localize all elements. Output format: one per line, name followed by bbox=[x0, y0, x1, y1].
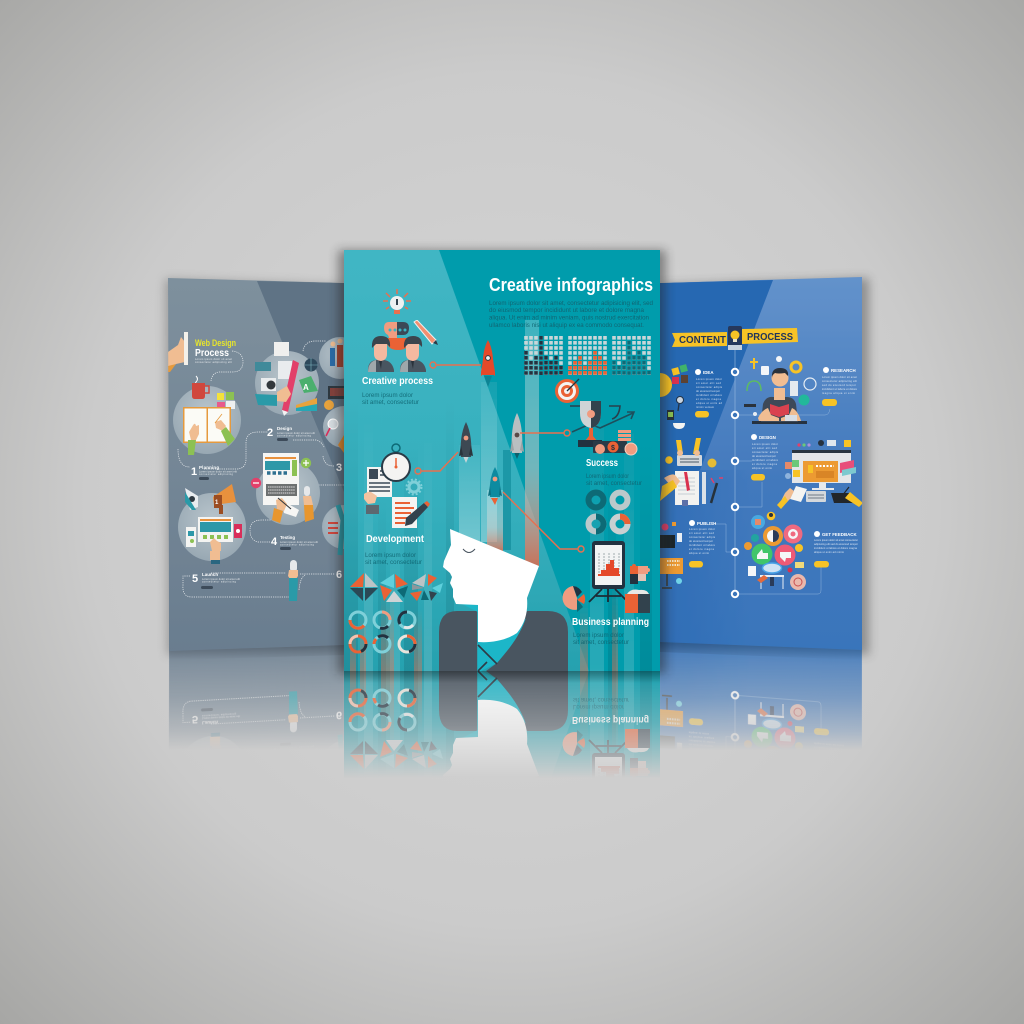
heading: web design process bbox=[195, 338, 236, 364]
icon: laptop screen bbox=[328, 386, 344, 399]
icon: red rocket bbox=[481, 340, 495, 387]
step: 1 planning bbox=[191, 465, 237, 480]
text block: idea: consectetur adipis bbox=[696, 385, 723, 389]
pyramid diagram 3 bbox=[410, 574, 443, 601]
step: 1 planning: consectetur adipiscing bbox=[199, 472, 234, 476]
shadow: center poster bbox=[338, 250, 666, 674]
rocket trails bbox=[459, 320, 539, 566]
icon: documents bbox=[364, 467, 430, 528]
text block: design: incididunt ut labore bbox=[752, 458, 779, 462]
connector: success to rocket bbox=[520, 430, 570, 436]
heading: web design process: Process bbox=[195, 347, 229, 359]
icon: money: $ bbox=[611, 445, 615, 452]
step: 5 launch: Launch bbox=[202, 572, 218, 577]
circle: team bbox=[319, 337, 344, 379]
text block: idea: et dolore magna bbox=[696, 397, 722, 401]
step: 5 launch: Lorem ipsum dolor sit amet elit bbox=[202, 577, 240, 581]
text block: publish bbox=[689, 520, 716, 568]
intro text: Lorem ipsum dolor sit amet, consectetur adipisicing elit, sed bbox=[489, 300, 653, 307]
icon: trophy bbox=[570, 401, 620, 442]
circle: magnifier bbox=[323, 406, 344, 453]
label: development: sit amet, consectetur bbox=[365, 559, 423, 566]
icon: folder bbox=[625, 590, 650, 613]
timeline nodes bbox=[732, 369, 738, 597]
icon: money bbox=[578, 430, 637, 455]
label: success: sit amet, consectetur bbox=[586, 480, 643, 487]
step: 2 design: 2 bbox=[267, 427, 273, 439]
icon: growth arrow bbox=[572, 412, 634, 432]
text block: research bbox=[822, 367, 858, 406]
icon: teal rocket bbox=[488, 467, 502, 505]
heading: web design process: Web Design bbox=[195, 338, 236, 348]
circle: design: A bbox=[303, 383, 309, 392]
step: 3: 3 bbox=[336, 462, 342, 474]
banner: content process bbox=[672, 326, 798, 350]
text block: publish: consectetur adipis bbox=[689, 535, 716, 539]
icon: stopwatch bbox=[382, 444, 410, 481]
text block: research: magna aliqua ut enim bbox=[822, 391, 855, 395]
icon: plus bbox=[301, 458, 311, 468]
ring charts bbox=[350, 612, 415, 652]
icon: grey rocket bbox=[510, 413, 524, 459]
step: 1 planning: Lorem ipsum dolor sit amet elit bbox=[199, 470, 237, 474]
intro text: ullamco laboris nisi ut aliquip ex ea commodo consequat. bbox=[489, 322, 644, 329]
step: 5 launch: consectetur adipiscing bbox=[202, 580, 237, 584]
shadow: side posters bbox=[165, 278, 869, 655]
text block: get feedback: GET FEEDBACK bbox=[822, 532, 857, 537]
reflection: center poster bbox=[344, 671, 660, 1022]
label: creative process: Creative process bbox=[362, 376, 433, 387]
step: 2 design bbox=[267, 426, 315, 441]
text block: research: incididunt ut labore et dolore bbox=[822, 387, 858, 391]
panel: web design process poster bbox=[168, 278, 366, 651]
text block: research: consectetur adipiscing elit bbox=[822, 379, 857, 383]
step: 4 testing: Lorem ipsum dolor sit amet elit bbox=[280, 540, 318, 544]
pixel chart: teal bbox=[614, 336, 649, 376]
poster lower area bbox=[344, 320, 660, 671]
reflection: left poster bbox=[168, 637, 366, 1021]
icon: minus bbox=[251, 478, 261, 488]
text block: idea: sit amet elit sed bbox=[696, 381, 722, 385]
text block: idea: minim veniam bbox=[696, 405, 714, 409]
text block: idea: do eiusmod tempor bbox=[696, 389, 720, 393]
icon: hand on mouse bbox=[288, 560, 298, 601]
label: success bbox=[586, 458, 643, 487]
text block: idea: IDEA bbox=[703, 370, 714, 375]
icon: megaphone bbox=[213, 484, 236, 514]
pixel chart: orange bbox=[570, 336, 605, 376]
label: development: Lorem ipsum dolor bbox=[365, 552, 417, 559]
illustration: feedback cluster bbox=[744, 512, 806, 590]
intro text bbox=[489, 300, 653, 329]
connector: development to rocket bbox=[415, 452, 458, 474]
icon: puzzle bbox=[630, 564, 650, 584]
label: business planning: sit amet, consectetur bbox=[573, 639, 630, 646]
text block: design: sit amet elit sed bbox=[752, 446, 778, 450]
heading: creative infographics: Creative infographics bbox=[489, 274, 653, 295]
connector: business planning to rocket bbox=[503, 492, 584, 552]
icon: pencil bbox=[414, 320, 438, 345]
text block: idea: Lorem ipsum dolor bbox=[696, 377, 722, 381]
label: development: Development bbox=[366, 534, 425, 545]
pyramid diagram 2 bbox=[380, 574, 408, 602]
text block: publish: incididunt ut labore bbox=[689, 543, 716, 547]
reflection edge shadow: sides bbox=[169, 642, 862, 660]
circle: launch bbox=[178, 493, 246, 564]
intro text: aliqua. Ut enim ad minim veniam, quis nostrud exercitation bbox=[489, 314, 649, 322]
text block: design: do eiusmod tempor bbox=[752, 454, 776, 458]
reflection edge shadow bbox=[344, 671, 660, 683]
text block: idea bbox=[695, 369, 723, 418]
circle: design bbox=[255, 342, 319, 416]
text block: design bbox=[751, 434, 779, 480]
pyramid diagram 1 bbox=[350, 573, 378, 601]
icon: megaphone: 1 bbox=[215, 500, 219, 506]
icon: easel with chart bbox=[589, 541, 628, 602]
text block: research: sed do eiusmod tempor bbox=[822, 383, 856, 387]
illustration: design workstation bbox=[777, 440, 863, 509]
text block: idea: incididunt ut labore bbox=[696, 393, 723, 397]
icon: idea bulb and notes bbox=[660, 364, 688, 429]
timeline bbox=[734, 350, 736, 733]
icon: two people bbox=[368, 336, 426, 372]
text block: get feedback: adipiscing elit sed do eiusmod tempor bbox=[814, 542, 858, 546]
illustration: publish media bbox=[660, 522, 683, 588]
icon: badge bbox=[324, 400, 334, 410]
text block: design: DESIGN bbox=[759, 435, 776, 440]
panel: content process poster bbox=[648, 277, 863, 650]
banner: content process: CONTENT bbox=[679, 334, 727, 346]
banner: content process: PROCESS bbox=[747, 331, 793, 343]
light diagonal beam: top bbox=[344, 250, 464, 320]
text block: research: RESEARCH bbox=[831, 368, 856, 373]
icon: speech bubbles bbox=[384, 322, 410, 350]
text block: publish: aliqua ut enim bbox=[689, 551, 709, 555]
circle: testing bbox=[256, 453, 320, 525]
figure: bust silhouette bbox=[439, 529, 568, 671]
label: business planning: Business planning bbox=[572, 617, 649, 628]
circle: step 6 bbox=[322, 505, 366, 555]
label: business planning bbox=[572, 617, 649, 646]
step: 5 launch: 5 bbox=[192, 573, 198, 585]
text block: get feedback: incididunt ut labore et dolore magna bbox=[814, 546, 858, 550]
label: creative process: Lorem ipsum dolor bbox=[362, 392, 414, 399]
panel: creative infographics poster bbox=[344, 250, 660, 671]
text block: publish: do eiusmod tempor bbox=[689, 539, 713, 543]
step: 2 design: Design bbox=[277, 426, 292, 431]
donut charts bbox=[588, 492, 628, 532]
icon: hand holding pencil bbox=[168, 332, 188, 372]
label: creative process: sit amet, consectetur bbox=[362, 399, 420, 406]
step: 5 launch bbox=[192, 572, 240, 589]
label: creative process bbox=[362, 376, 433, 406]
text block: publish: PUBLISH bbox=[697, 521, 716, 526]
text block: design: et dolore magna bbox=[752, 462, 778, 466]
text block: publish: sit amet elit sed bbox=[689, 531, 715, 535]
intro text: do eiusmod tempor incididunt ut labore et dolore magna bbox=[489, 307, 644, 314]
connector paths bbox=[178, 341, 344, 597]
text block: get feedback bbox=[814, 531, 858, 568]
icon: target bbox=[555, 379, 579, 403]
icon: dark rocket bbox=[459, 422, 473, 463]
step: 4 testing: Testing bbox=[280, 535, 295, 540]
pixel chart: dark bbox=[526, 336, 561, 376]
connector: creative process to rocket bbox=[430, 362, 481, 368]
step: 1 planning: 1 bbox=[191, 466, 197, 478]
text block: design: consectetur adipis bbox=[752, 450, 779, 454]
text block: design: Lorem ipsum dolor bbox=[752, 442, 778, 446]
icon: gear bbox=[406, 480, 422, 494]
circle: planning bbox=[173, 376, 241, 455]
poster upper area bbox=[344, 250, 660, 329]
light diagonal beam bbox=[344, 320, 589, 671]
text block: research: Lorem ipsum dolor sit amet bbox=[822, 375, 857, 379]
illustration: laptop hands and paper bbox=[660, 438, 723, 506]
step: 4 testing: 4 bbox=[271, 536, 278, 548]
icon: pie chart bbox=[563, 586, 585, 612]
label: success: Success bbox=[586, 458, 618, 469]
reflection: right poster bbox=[648, 632, 863, 1022]
step: 2 design: consectetur adipiscing bbox=[277, 434, 312, 438]
icon: rocket bbox=[185, 488, 198, 510]
step: 1 planning: Planning bbox=[199, 465, 219, 470]
label: business planning: Lorem ipsum dolor bbox=[573, 632, 625, 639]
step: 6: 6 bbox=[336, 569, 342, 581]
label: success: Lorem ipsum dolor bbox=[586, 473, 630, 480]
text block: idea: aliqua ut enim ad bbox=[696, 401, 723, 405]
step: 4 testing bbox=[271, 535, 318, 550]
text block: publish: Lorem ipsum dolor bbox=[689, 527, 715, 531]
step: 4 testing: consectetur adipiscing bbox=[280, 542, 315, 546]
text block: get feedback: aliqua ut enim ad minim bbox=[814, 550, 844, 554]
vertical stripes bbox=[344, 400, 652, 671]
connector lines bbox=[716, 409, 830, 594]
text block: publish: et dolore magna bbox=[689, 547, 715, 551]
heading: web design process: Lorem ipsum dolor sit amet bbox=[195, 357, 232, 361]
illustration: reading person bbox=[744, 356, 816, 424]
label: development bbox=[365, 534, 425, 566]
icon: lightbulb bbox=[383, 289, 411, 314]
text block: design: aliqua ut enim bbox=[752, 466, 772, 470]
step: 2 design: Lorem ipsum dolor sit amet elit bbox=[277, 431, 315, 435]
text block: get feedback: Lorem ipsum dolor sit amet consectetur bbox=[814, 538, 858, 542]
heading: web design process: consectetur adipiscing elit bbox=[195, 360, 232, 364]
